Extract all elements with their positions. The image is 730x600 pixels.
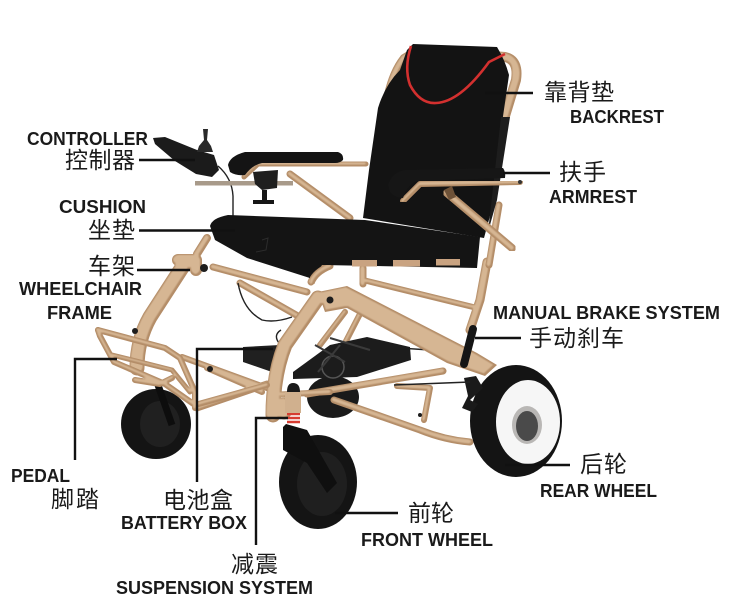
label: front wheel [335,500,493,550]
battery box [243,337,411,379]
label: wheelchair frame [19,253,190,323]
label: pedal: 脚踏 [51,486,99,512]
suspension spring [287,414,300,422]
label: rear wheel: REAR WHEEL [540,481,657,501]
controller [153,129,293,204]
label: pedal [11,359,117,512]
label: cushion [59,197,235,243]
far rear wheel [307,376,359,418]
label: front wheel: 前轮 [408,500,454,526]
label: pedal: PEDAL [11,466,70,486]
label: cushion: 坐垫 [88,217,135,243]
wheelchair illustration [98,44,562,529]
backrest [363,44,510,238]
label: rear wheel: 后轮 [580,451,627,477]
manual brake [394,329,483,412]
label: battery box [121,349,273,533]
label: front wheel: FRONT WHEEL [361,530,493,550]
label: armrest [503,159,637,207]
label: wheelchair frame: WHEELCHAIR [19,279,142,299]
label: manual brake system [475,303,720,351]
label: controller [27,129,195,173]
label: backrest: BACKREST [570,107,664,127]
label: wheelchair frame: FRAME [47,303,112,323]
backrest upper frame [388,53,517,265]
label: suspension system [116,418,313,598]
label: battery box: BATTERY BOX [121,513,247,533]
label: wheelchair frame: 车架 [88,253,135,279]
label: suspension system: SUSPENSION SYSTEM [116,578,313,598]
label: cushion: CUSHION [59,197,146,217]
red headrest trim [407,46,505,103]
seat cushion [210,215,480,279]
seat straps [352,259,460,266]
near armrest [388,168,522,248]
label: backrest: 靠背垫 [544,79,614,105]
label: controller: CONTROLLER [27,129,148,149]
main frame [137,238,497,415]
label: backrest [485,79,664,127]
front seat post [311,266,330,283]
rear wheel [470,365,562,477]
front wheel with fork and spring [279,383,357,529]
label: manual brake system: MANUAL BRAKE SYSTEM [493,303,720,323]
label: armrest: 扶手 [559,159,606,185]
front small wheel [121,385,191,459]
far armrest strut [244,164,366,218]
far armrest pad [228,152,343,175]
label: manual brake system: 手动刹车 [529,325,624,351]
pedal [98,330,267,408]
label: battery box: 电池盒 [163,487,233,513]
joint bolts [132,264,422,417]
label: controller: 控制器 [65,147,135,173]
rear frame tubes [182,262,487,442]
cable [218,166,430,350]
label: suspension system: 减震 [231,551,278,577]
label: rear wheel [505,451,657,501]
suspension cylinder [285,392,301,413]
label: armrest: ARMREST [549,187,637,207]
